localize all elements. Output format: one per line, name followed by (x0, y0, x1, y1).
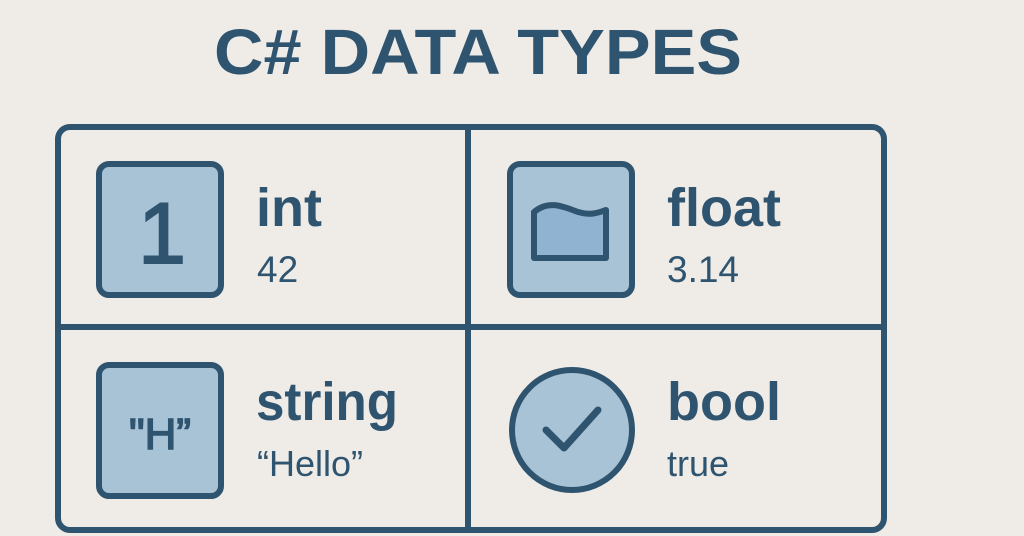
value: 42: 42 (257, 249, 298, 290)
label: bool: bool (667, 372, 781, 432)
icon: check circle (512, 370, 632, 490)
icon: number 1 (99, 164, 221, 295)
value: 3.14: 3.14 (667, 249, 739, 290)
grid panel (58, 127, 884, 530)
cell: bool (512, 370, 781, 490)
value: Hello: “Hello” (257, 443, 363, 484)
cell: string (99, 365, 398, 496)
label: float: float (667, 178, 781, 238)
label: string: string (256, 372, 398, 432)
icon: wave box (510, 164, 632, 295)
label: int: int (256, 178, 322, 238)
value: true: true (667, 443, 729, 484)
icon: number 1: 1 (138, 186, 186, 282)
icon: quoted H: "H” (129, 410, 191, 459)
cell: float (510, 164, 781, 295)
title: C# DATA TYPES (214, 16, 742, 88)
icon: quoted H (99, 365, 221, 496)
cell: int (99, 164, 322, 295)
